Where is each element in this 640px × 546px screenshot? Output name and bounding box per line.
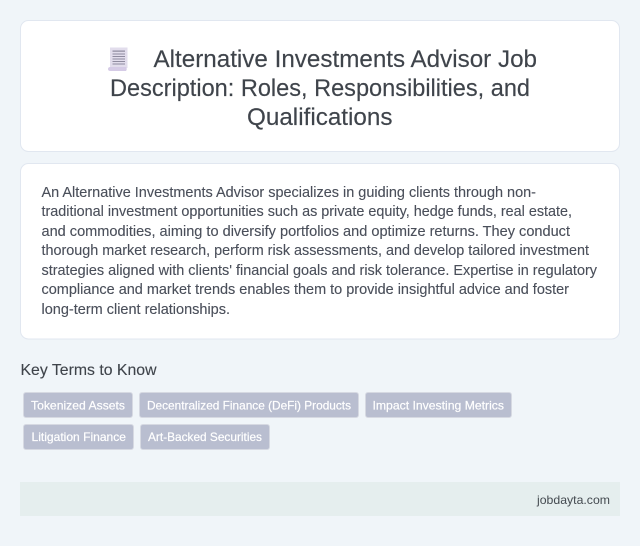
panel: title card <box>20 20 620 152</box>
title: Description: Roles, Responsibilities, and <box>110 75 530 102</box>
text block: description: thorough market research, perform risk assessments, and develop tailored investment <box>42 243 589 259</box>
title: Alternative Investments Advisor Job <box>154 46 537 73</box>
icon: document scroll <box>108 48 128 71</box>
text block: description: strategies aligned with clients' financial goals and risk tolerance. Expertise in regulatory <box>42 263 598 279</box>
tag: Litigation Finance <box>24 424 134 450</box>
text block: description: compliance and market trends enables them to provide insightful advice and foster <box>42 282 569 298</box>
footer: jobdayta.com <box>536 493 610 507</box>
tag: Litigation Finance: Litigation Finance <box>32 430 126 444</box>
heading: key terms: Key Terms to Know <box>20 362 157 379</box>
tag: Tokenized Assets <box>24 392 132 418</box>
text block: description: traditional investment opportunities such as private equity, hedge funds, real estate, <box>42 204 572 220</box>
title: Qualifications <box>247 104 392 131</box>
panel: description <box>20 164 620 339</box>
tag: Impact Investing Metrics: Impact Investing Metrics <box>372 398 504 412</box>
text block: description: and commodities, aiming to diversify portfolios and optimize returns. They conduct <box>42 224 570 240</box>
text block: description: An Alternative Investments Advisor specializes in guiding clients through non- <box>42 185 536 201</box>
text block: description <box>42 185 598 318</box>
tag: Decentralized Finance (DeFi) Products: Decentralized Finance (DeFi) Products <box>147 398 351 412</box>
footer <box>20 482 620 516</box>
tag: Art-Backed Securities: Art-Backed Securities <box>148 430 262 444</box>
text block: description: long-term client relationships. <box>42 302 230 318</box>
tag: Impact Investing Metrics <box>366 392 512 418</box>
tag: Art-Backed Securities <box>140 424 270 450</box>
tag: Decentralized Finance (DeFi) Products <box>140 392 358 418</box>
tag: Tokenized Assets: Tokenized Assets <box>31 398 125 412</box>
title <box>110 46 537 131</box>
